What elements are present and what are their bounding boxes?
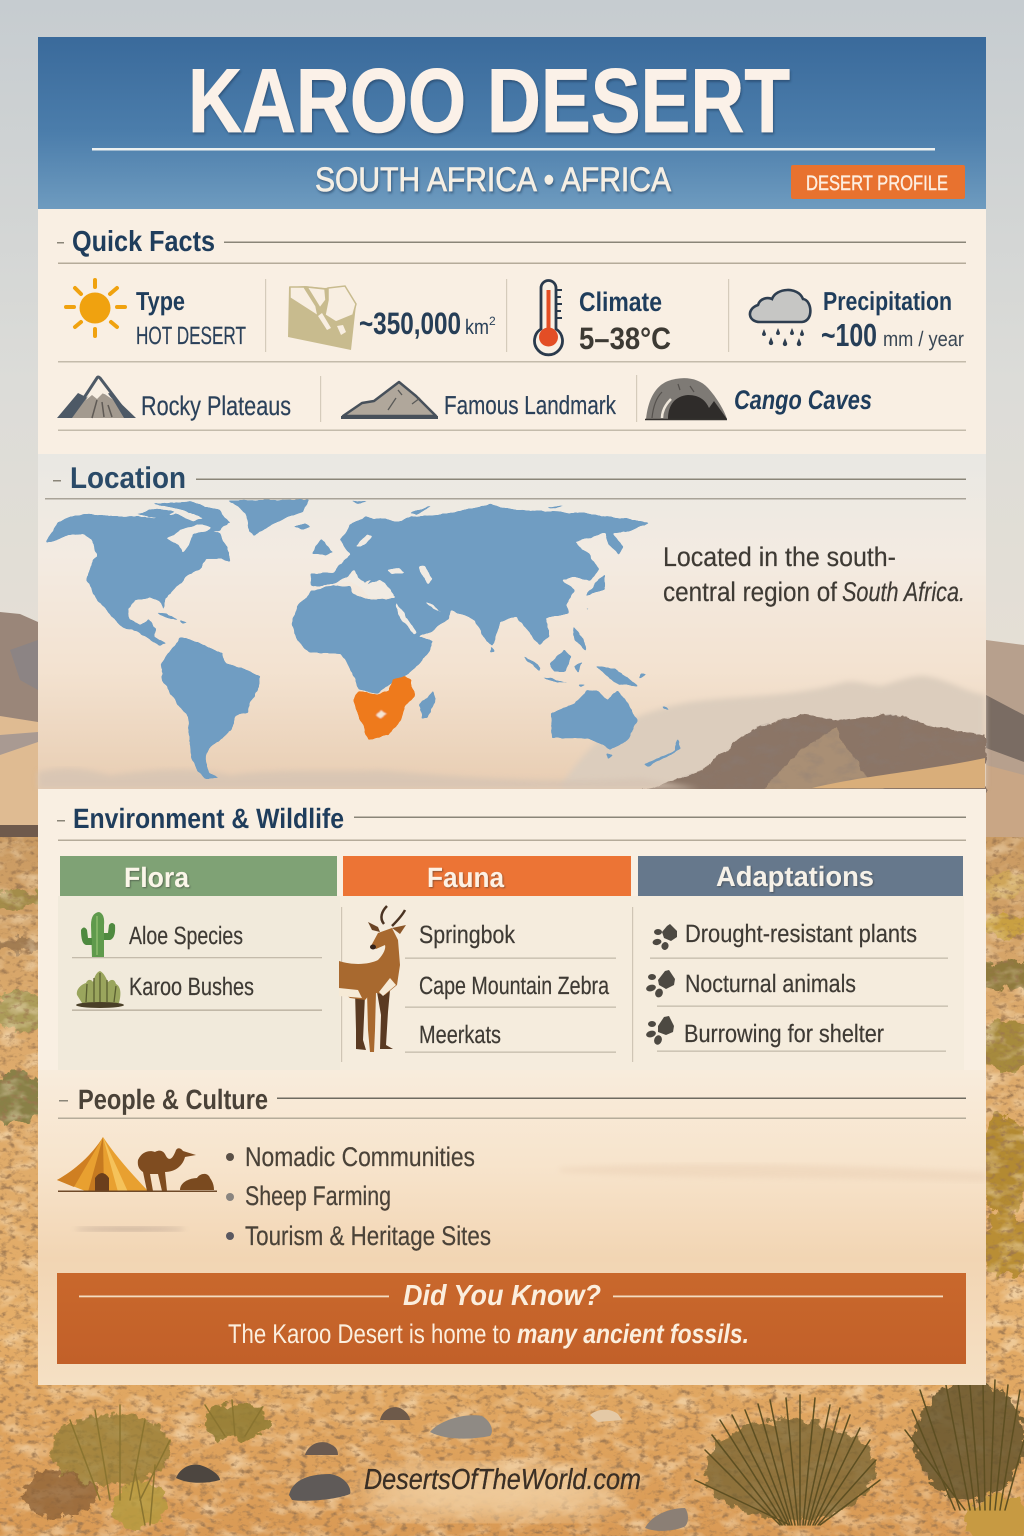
- callout: did you know: Did You Know?: [403, 1280, 601, 1312]
- cango caves label: Cango Caves: [734, 385, 872, 415]
- column: adaptations: Burrowing for shelter: [684, 1020, 884, 1048]
- fact: climate: 5–38°C: [579, 321, 671, 356]
- icon: tent and camels: [57, 1137, 217, 1192]
- location description: Located in the south-: [663, 542, 896, 572]
- fact: precipitation: ~100: [821, 317, 877, 353]
- column: adaptations: Adaptations: [716, 861, 874, 892]
- column: flora: Aloe Species: [129, 922, 243, 950]
- icon: rain cloud: [750, 290, 810, 346]
- fact: type: HOT DESERT: [136, 322, 246, 350]
- column: fauna: [339, 856, 631, 1062]
- icon: cactus: [81, 912, 115, 958]
- column: fauna: Springbok: [419, 921, 515, 949]
- title: KAROO DESERT: [188, 51, 790, 152]
- location description: South Africa.: [842, 577, 965, 607]
- panel: quick facts: [38, 209, 986, 454]
- fact: precipitation: mm / year: [883, 328, 964, 351]
- highlighted region: southern Africa: [353, 675, 415, 740]
- fact: area: 2: [489, 314, 496, 328]
- mountains behind map: [38, 676, 985, 792]
- column: fauna: Fauna: [427, 862, 504, 893]
- list: people and culture: Nomadic Communities: [245, 1142, 475, 1172]
- fact: type: Type: [136, 286, 185, 316]
- column: fauna: Cape Mountain Zebra: [419, 972, 609, 1000]
- column: adaptations: Nocturnal animals: [685, 970, 856, 998]
- world map: [46, 499, 681, 778]
- icon: paw print: [652, 924, 677, 951]
- rocky plateaus label: Rocky Plateaus: [141, 391, 291, 421]
- fact: precipitation: Precipitation: [823, 286, 952, 316]
- column: flora: [60, 856, 337, 1011]
- list: people and culture: Sheep Farming: [245, 1181, 391, 1211]
- fact: area: km: [465, 316, 489, 339]
- icon: thermometer: [534, 280, 562, 355]
- column: adaptations: [632, 856, 963, 1062]
- panel: environment and wildlife: [38, 789, 986, 1070]
- icon: sun: [66, 280, 125, 336]
- heading: people and culture: People & Culture: [78, 1084, 268, 1115]
- heading: environment and wildlife: Environment & Wildlife: [73, 803, 344, 834]
- icon: rocky mountain: [57, 377, 136, 418]
- panel: people and culture: [38, 1070, 986, 1385]
- fact: climate: [579, 287, 671, 356]
- icon: paw print: [645, 970, 675, 999]
- fact: area: ~350,000: [359, 306, 461, 341]
- panel: header: [38, 37, 986, 209]
- fact: climate: Climate: [579, 287, 662, 317]
- subtitle: SOUTH AFRICA • AFRICA: [315, 161, 671, 199]
- heading: quick facts: Quick Facts: [72, 226, 215, 258]
- column: fauna: Meerkats: [419, 1021, 501, 1049]
- location description: [663, 542, 965, 607]
- column: flora: Flora: [124, 862, 189, 893]
- callout: did you know: many ancient fossils.: [517, 1319, 749, 1349]
- icon: area map: [288, 286, 356, 350]
- famous landmark label: Famous Landmark: [444, 390, 617, 420]
- callout: did you know: [57, 1273, 966, 1364]
- badge: desert profile: DESERT PROFILE: [806, 172, 948, 195]
- location description: central region of: [663, 577, 837, 607]
- heading: location: Location: [70, 462, 186, 495]
- badge: desert profile: [791, 165, 965, 199]
- list: people and culture: [226, 1142, 491, 1251]
- icon: paw print: [645, 1016, 674, 1046]
- fact: precipitation: [821, 286, 964, 353]
- footer: website: DesertsOfTheWorld.com: [364, 1464, 641, 1496]
- icon: karoo bush: [76, 971, 124, 1008]
- icon: cave: [645, 378, 727, 420]
- column: flora: Karoo Bushes: [129, 973, 254, 1001]
- fact: type: [136, 286, 246, 350]
- footer scenery: rocks and shrubs: [22, 1380, 1024, 1536]
- callout: did you know: The Karoo Desert is home to: [228, 1319, 511, 1349]
- icon: landmark mountain: [341, 382, 438, 418]
- list: people and culture: Tourism & Heritage Sites: [245, 1221, 491, 1251]
- column: adaptations: Drought-resistant plants: [685, 920, 917, 948]
- panel: location: [38, 454, 986, 792]
- icon: springbok: [339, 906, 406, 1052]
